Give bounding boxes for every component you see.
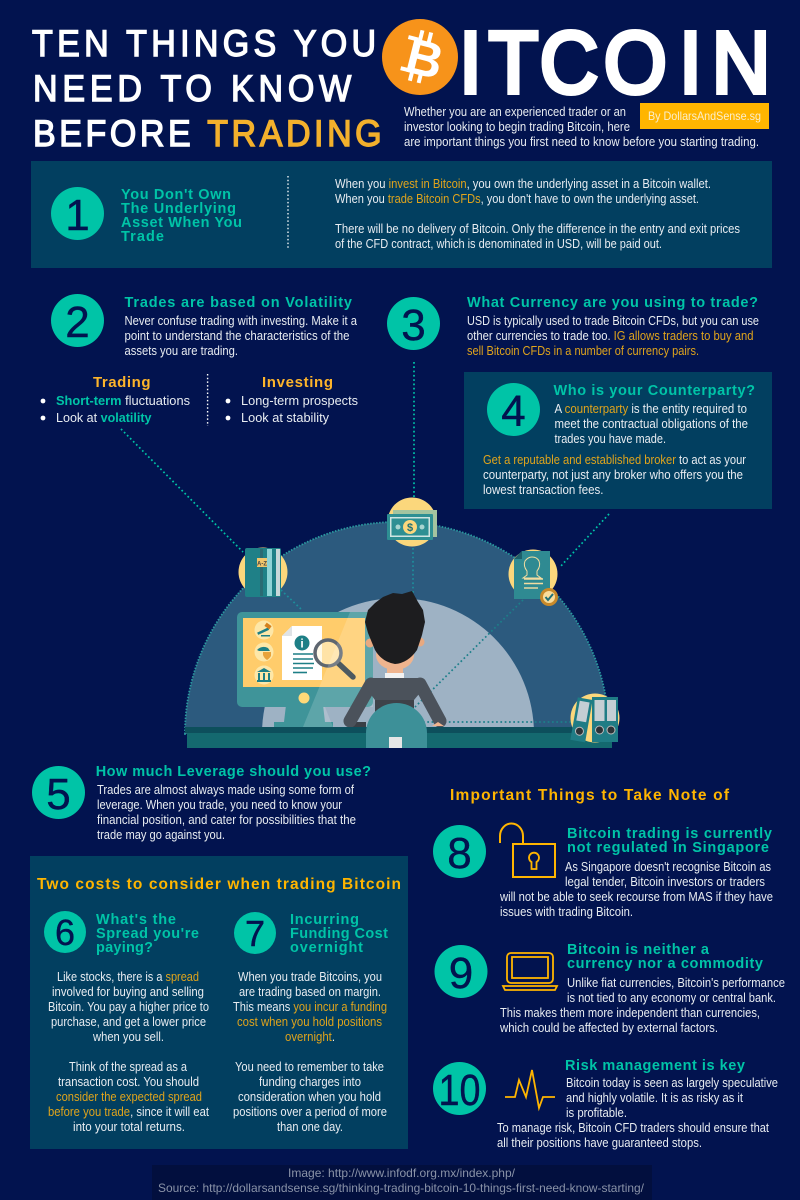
text 4: lowest transaction fees.	[483, 483, 604, 497]
connector lines	[121, 362, 609, 722]
chair	[366, 703, 427, 748]
number 5	[32, 766, 85, 819]
heading 7: Incurring	[290, 912, 359, 928]
bitcoin logo	[382, 14, 770, 111]
text 8: legal tender, Bitcoin investors or traders	[565, 874, 765, 889]
text 7: funding charges into	[259, 1074, 361, 1089]
icon: money	[387, 498, 437, 546]
text 3: USD is typically used to trade Bitcoin CFDs, but you can use	[467, 314, 759, 328]
text 3: other currencies to trade too. IG allows traders to buy and	[467, 329, 754, 343]
text 8	[499, 859, 773, 919]
list: investing	[226, 374, 358, 425]
intro text	[404, 105, 759, 149]
text 7: You need to remember to take	[235, 1059, 384, 1074]
heading 8	[567, 826, 772, 856]
heading 7	[290, 912, 388, 956]
text 4: A counterparty is the entity required to	[554, 402, 747, 416]
text 5	[97, 782, 356, 842]
heading 1: You Don't Own	[121, 187, 231, 203]
footer: sources: Image: http://www.infodf.org.mx/index.php/	[288, 1166, 516, 1180]
text 5: trade may go against you.	[97, 827, 225, 842]
text 1: of the CFD contract, which is denominated in USD, will be paid out.	[335, 237, 662, 251]
number 1	[51, 187, 104, 240]
text 4: trades you have made.	[554, 432, 666, 446]
text 7: overnight.	[285, 1029, 335, 1044]
text 2: Never confuse trading with investing. Make it a	[124, 314, 357, 328]
text 4: counterparty, not just any broker who offers you the	[483, 468, 743, 482]
list: trading: Short-term fluctuations	[56, 393, 190, 408]
text 9: This makes them more independent than currencies,	[500, 1005, 760, 1020]
icon: laptop	[503, 953, 557, 990]
heading 7: overnight	[290, 940, 363, 956]
text 10: and highly volatile. It is as risky as it	[566, 1090, 743, 1105]
number 3: 3	[401, 301, 426, 350]
text 6: involved for buying and selling	[52, 984, 204, 999]
text 1	[335, 177, 740, 251]
list: trading	[41, 374, 190, 425]
heading 6: What's the	[96, 912, 176, 928]
intro text: are important things you first need to know before you starting trading.	[404, 135, 759, 149]
heading 1: The Underlying	[121, 201, 236, 217]
text 1: When you invest in Bitcoin, you own the underlying asset in a Bitcoin wallet.	[335, 177, 711, 191]
heading 6: Spread you're	[96, 926, 199, 942]
text 6	[48, 969, 209, 1134]
text 7: than one day.	[277, 1119, 343, 1134]
icon: open lock	[500, 823, 555, 877]
icon: dictionary	[238, 548, 288, 597]
intro text: Whether you are an experienced trader or an	[404, 105, 626, 119]
text 2	[124, 314, 357, 358]
icon: dictionary: A-Z	[257, 562, 267, 568]
list: trading: Look at volatility	[56, 410, 152, 425]
number 2: 2	[65, 298, 90, 347]
number 8: 8	[447, 829, 472, 878]
heading 9: currency nor a commodity	[567, 956, 763, 972]
heading 7: Funding Cost	[290, 926, 388, 942]
number 1: 1	[65, 191, 90, 240]
light semicircle	[262, 598, 534, 734]
icon: profile document	[508, 550, 558, 606]
section: point 3	[387, 295, 759, 358]
icon: bitcoin coin: B	[400, 27, 449, 90]
text 2: point to understand the characteristics of the	[124, 329, 350, 343]
icon: binders	[570, 694, 620, 742]
section: point 5	[32, 764, 371, 842]
heading: important things: Important Things to Take Note of	[450, 787, 730, 804]
text 10: is profitable.	[566, 1105, 627, 1120]
text 9	[499, 975, 785, 1035]
list: investing: Long-term prospects	[241, 393, 358, 408]
section: point 10	[433, 1058, 778, 1150]
number 7	[234, 912, 276, 954]
icon: bitcoin coin	[382, 19, 458, 95]
text 6: Bitcoin. You pay a higher price to	[48, 999, 209, 1014]
section: point 2	[41, 294, 358, 426]
title	[32, 23, 382, 154]
badge: author	[640, 103, 769, 129]
wordmark: ITCOIN	[459, 14, 770, 111]
panel: point 1	[31, 161, 772, 268]
text 6: when you sell.	[92, 1029, 164, 1044]
desk	[185, 727, 612, 748]
illustration: trader at desk	[121, 362, 620, 748]
number 7: 7	[245, 913, 265, 954]
text 4: meet the contractual obligations of the	[554, 417, 748, 431]
heading 10: Risk management is key	[565, 1058, 745, 1074]
intro text: investor looking to begin trading Bitcoin, here	[404, 120, 630, 134]
list: trading: Trading	[93, 374, 150, 391]
heading 6	[96, 912, 199, 956]
text 7: positions over a period of more	[233, 1104, 387, 1119]
number 10: 10	[438, 1066, 480, 1115]
text 2: assets you are trading.	[124, 344, 238, 358]
section: point 8	[433, 823, 773, 919]
number 9: 9	[449, 949, 473, 998]
list: investing: Investing	[262, 374, 333, 391]
title: TEN THINGS YOU	[32, 23, 376, 64]
number 3	[387, 297, 440, 350]
text 6: Like stocks, there is a spread	[57, 969, 199, 984]
text 6: transaction cost. You should	[58, 1074, 199, 1089]
text 5: financial position, and cater for possibilities that the	[97, 812, 356, 827]
text 4	[483, 402, 748, 497]
text 1: When you trade Bitcoin CFDs, you don't have to own the underlying asset.	[335, 192, 699, 206]
text 10	[497, 1075, 778, 1150]
panel heading: Two costs to consider when trading Bitcoin	[37, 876, 401, 893]
number 4: 4	[501, 387, 526, 436]
text 3: sell Bitcoin CFDs in a number of currency pairs.	[467, 344, 699, 358]
heading 5: How much Leverage should you use?	[96, 764, 371, 780]
heading 2: Trades are based on Volatility	[124, 295, 352, 311]
section: point 9	[434, 942, 785, 1035]
badge: author: By DollarsAndSense.sg	[648, 109, 761, 123]
title: NEED TO KNOW	[33, 68, 352, 109]
footer: sources: Source: http://dollarsandsense.sg/thinking-trading-bitcoin-10-things-first-need-know-starting/	[158, 1181, 645, 1195]
monitor: i	[300, 636, 304, 650]
heading 9	[567, 942, 763, 972]
text 7: are trading based on margin.	[239, 984, 381, 999]
monitor	[237, 612, 373, 727]
heading 1	[121, 187, 242, 245]
panel: two costs	[30, 856, 408, 1149]
text 4: Get a reputable and established broker to act as your	[483, 453, 746, 467]
heading 1: Asset When You	[121, 215, 242, 231]
number 6	[44, 911, 86, 953]
text 6: into your total returns.	[73, 1119, 185, 1134]
text 8: issues with trading Bitcoin.	[500, 904, 633, 919]
text 6: consider the expected spread	[56, 1089, 202, 1104]
number 9	[434, 945, 488, 998]
panel: point 4	[464, 372, 772, 509]
text 9: which could be affected by external factors.	[499, 1020, 718, 1035]
icon: pulse line	[505, 1070, 555, 1108]
list: investing: Look at stability	[241, 410, 329, 425]
heading 6: paying?	[96, 940, 153, 956]
heading 4: Who is your Counterparty?	[554, 383, 755, 399]
heading 8: not regulated in Singapore	[567, 840, 769, 856]
number 5: 5	[46, 770, 71, 819]
heading 3: What Currency are you using to trade?	[467, 295, 758, 311]
icon: money: $	[407, 522, 413, 534]
text 3	[467, 314, 759, 358]
text 7: This means you incur a funding	[233, 999, 387, 1014]
number 6: 6	[55, 912, 75, 953]
footer: sources	[152, 1165, 652, 1200]
text 7: When you trade Bitcoins, you	[238, 969, 382, 984]
text 1: There will be no delivery of Bitcoin. Only the difference in the entry and exit prices	[335, 222, 740, 236]
person	[350, 591, 444, 727]
text 5: leverage. When you trade, you need to know your	[97, 797, 343, 812]
number 2	[51, 294, 104, 347]
text 6: Think of the spread as a	[69, 1059, 188, 1074]
text 7: cost when you hold positions	[237, 1014, 382, 1029]
text 6: before you trade, since it will eat	[48, 1104, 209, 1119]
text 6: purchase, and get a lower price	[51, 1014, 206, 1029]
text 10: all their positions have guaranteed stops.	[497, 1135, 702, 1150]
number 8	[433, 825, 486, 878]
heading 1: Trade	[121, 229, 164, 245]
heading 9: Bitcoin is neither a	[567, 942, 710, 958]
number 4	[487, 383, 540, 436]
large semicircle	[185, 522, 609, 734]
title: BEFORE TRADING	[33, 113, 382, 154]
text 5: Trades are almost always made using some form of	[97, 782, 354, 797]
text 7	[233, 969, 387, 1134]
heading 8: Bitcoin trading is currently	[567, 826, 772, 842]
text 7: consideration when you hold	[238, 1089, 381, 1104]
